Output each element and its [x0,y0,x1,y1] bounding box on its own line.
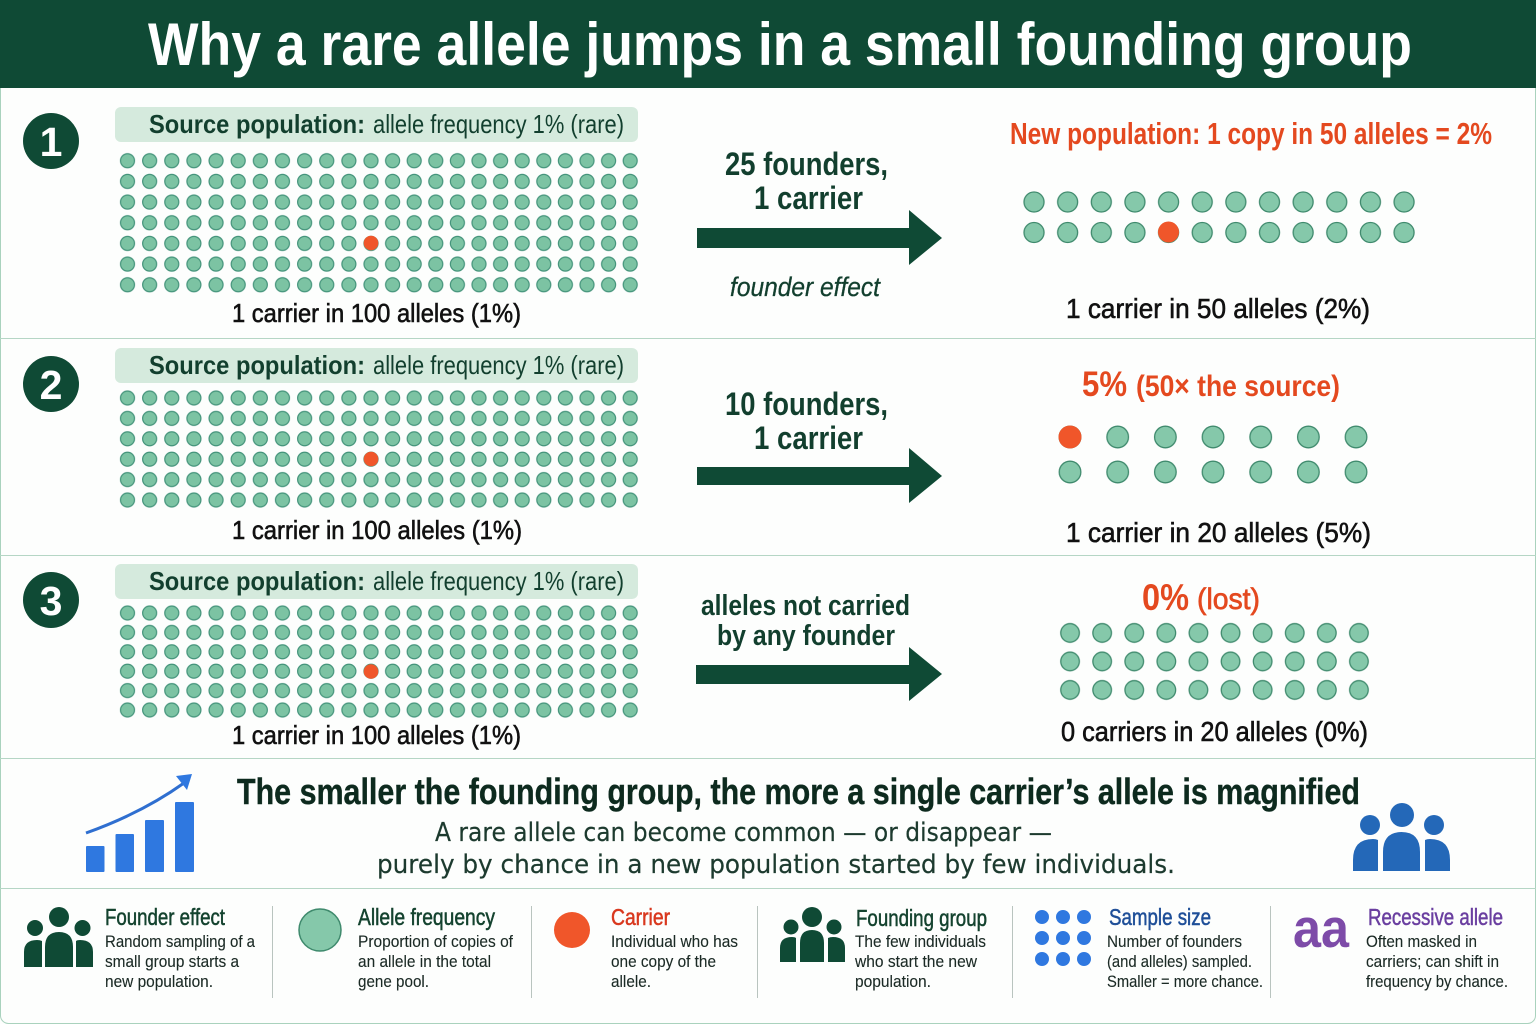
icon: founders people [24,907,93,967]
takeaway text: A rare allele can become common — or disappear — [435,818,1052,848]
takeaway text: purely by chance in a new population started by few individuals. [377,850,1175,880]
arrow label: 10 founders, [725,386,888,422]
icon: rising bar chart [86,774,194,872]
legend: recessive allele: Often masked in [1366,932,1477,951]
legend: allele frequency: an allele in the total [358,952,491,971]
source population heading [115,107,638,142]
legend: founder effect: Random sampling of a [105,932,255,951]
founder effect note: founder effect [730,272,881,302]
legend: allele frequency: Proportion of copies of [358,932,513,951]
title banner: Why a rare allele jumps in a small founding group [148,11,1412,78]
panel: scenario 2 [23,348,1380,548]
legend: founding group: Founding group [856,905,987,931]
result heading: (lost) [1197,583,1260,616]
number badge 1: 1 [40,119,62,165]
source population heading [115,348,638,383]
icon: recessive aa: aa [1293,897,1349,959]
legend: founder effect [105,904,255,991]
source population heading: allele frequency 1% (rare) [373,350,624,380]
source caption: 1 carrier in 100 alleles (1%) [232,298,521,328]
source population heading [115,564,638,599]
icon: carrier circle [554,912,590,948]
legend: recessive allele: Recessive allele [1368,904,1503,930]
number badge 3: 3 [40,578,62,624]
takeaway heading: The smaller the founding group, the more a single carrier’s allele is magnified [237,771,1360,812]
result heading [1142,577,1260,618]
number badge 1 [23,113,79,169]
panel: scenario 3 [23,564,1375,750]
legend: recessive allele: carriers; can shift in [1366,952,1499,971]
legend: sample size [1107,904,1263,991]
arrow label: by any founder [717,620,895,652]
source allele dot grid [116,603,641,720]
legend: recessive allele: frequency by chance. [1366,972,1508,991]
icon: group of people [1353,803,1450,871]
result heading: (50× the source) [1136,370,1340,403]
source caption: 1 carrier in 100 alleles (1%) [232,515,522,545]
legend: carrier: allele. [611,972,651,991]
legend: carrier [611,904,738,991]
title banner [0,0,1536,88]
result heading: 0% [1142,577,1189,618]
new population dots [1054,619,1375,704]
source population heading: Source population: [149,350,365,380]
number badge 3 [23,572,79,628]
source population heading: allele frequency 1% (rare) [373,109,624,139]
icon: founding group people [780,907,845,962]
legend: recessive allele [1366,904,1508,991]
new population dots [1017,187,1421,248]
arrow label [701,590,910,652]
new population caption: 1 carrier in 50 alleles (2%) [1066,293,1370,324]
arrow label [725,146,888,216]
legend: founding group: The few individuals [855,932,986,951]
source population heading: Source population: [149,109,365,139]
panel: glossary legend [24,897,1508,998]
arrow label: 1 carrier [754,180,863,216]
source allele dot grid [116,150,641,295]
arrow [697,210,942,265]
legend: sample size: Sample size [1109,904,1211,930]
arrow [696,647,942,701]
arrow label: 25 founders, [725,146,888,182]
legend: founder effect: new population. [105,972,213,991]
arrow label: 1 carrier [754,420,863,456]
legend: allele frequency: Allele frequency [358,904,495,930]
legend: founding group: population. [855,972,931,991]
number badge 2: 2 [40,362,62,408]
legend: allele frequency: gene pool. [358,972,429,991]
takeaway text [377,818,1175,880]
legend: carrier: Individual who has [611,932,738,951]
result heading: 5% [1082,365,1127,404]
panel: scenario 1 [23,107,1492,328]
legend: sample size: Smaller = more chance. [1107,972,1263,991]
number badge 2 [23,356,79,412]
new population caption: 1 carrier in 20 alleles (5%) [1066,517,1371,548]
legend: sample size: Number of founders [1107,932,1242,951]
icon: sample size dots [1035,910,1091,966]
new population caption: 0 carriers in 20 alleles (0%) [1061,716,1368,747]
legend: founding group: who start the new [854,952,978,971]
source caption: 1 carrier in 100 alleles (1%) [232,720,521,750]
panel: key takeaway [86,771,1450,880]
arrow [697,448,942,503]
source population heading: allele frequency 1% (rare) [373,566,624,596]
legend: carrier: one copy of the [611,952,716,971]
arrow label [725,386,888,456]
legend: founder effect: Founder effect [105,904,225,930]
source population heading: Source population: [149,566,365,596]
new population dots [1046,420,1380,490]
result heading [1082,365,1340,404]
legend: founder effect: small group starts a [105,952,239,971]
icon: allele circle [299,909,341,951]
legend: allele frequency [358,904,513,991]
source allele dot grid [116,388,641,510]
legend: founding group [854,905,987,991]
legend: carrier: Carrier [611,904,670,930]
arrow label: alleles not carried [701,590,910,622]
legend: sample size: (and alleles) sampled. [1107,952,1252,971]
